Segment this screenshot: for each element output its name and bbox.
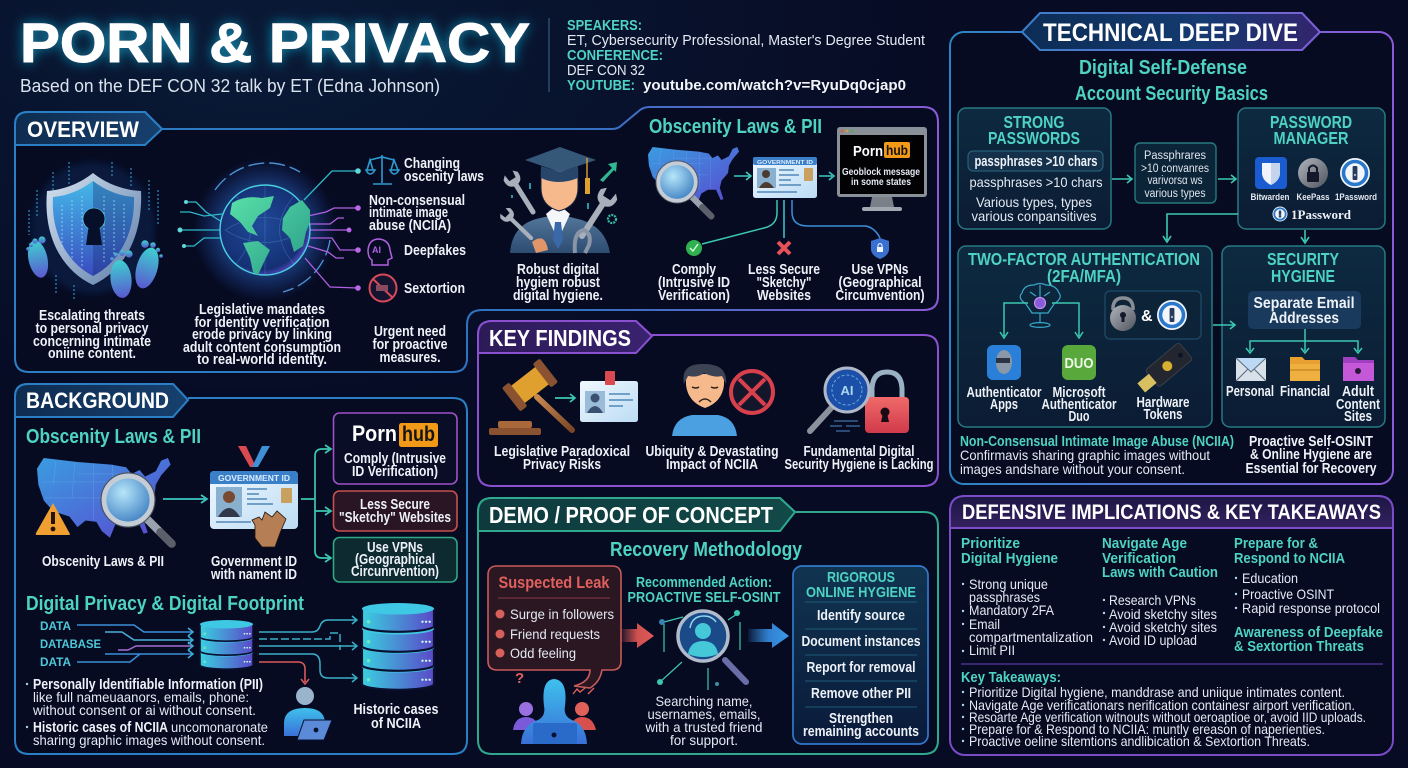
icon: check xyxy=(686,240,702,256)
box: rigorous online hygiene: Identify source xyxy=(817,608,905,624)
icon: authenticator app xyxy=(987,345,1021,380)
icon: globe with circuit lines xyxy=(178,158,361,302)
column: navigate age verification xyxy=(1102,535,1218,648)
box: two-factor authentication: Microsoft xyxy=(1052,385,1106,401)
column: prepare for NCIIA: Respond to NCIIA xyxy=(1234,550,1345,567)
text: robust hygiene: Robust digital xyxy=(517,262,599,278)
caption: ubiquity xyxy=(646,444,778,473)
caption: government ID xyxy=(210,554,297,583)
panel: overview xyxy=(15,107,938,372)
box: comply: hub xyxy=(402,423,435,446)
label: NCIIA: abuse (NCIIA) xyxy=(369,218,451,234)
divider xyxy=(548,18,550,92)
text: robust hygiene xyxy=(513,262,603,304)
label: changing laws: oscenity laws xyxy=(404,169,484,185)
caption: fundamental: Security Hygiene is Lacking xyxy=(784,457,934,473)
panel: key findings xyxy=(478,321,938,486)
icon: financial folder xyxy=(1290,357,1320,381)
box: comply: Comply (Intrusive xyxy=(344,451,446,467)
icon: sad person and red X xyxy=(672,364,773,436)
arrow: passphrases to manager xyxy=(1218,175,1236,183)
column: navigate age verification: Avoid sketchy sites xyxy=(1109,606,1217,622)
box: password manager: MANAGER xyxy=(1274,128,1349,148)
panel: demo xyxy=(478,498,938,754)
talk details: youtube.com/watch?v=RyuDq0cjap0 xyxy=(643,77,906,94)
box: two-factor authentication: Apps xyxy=(990,397,1018,413)
box: suspected leak: Surge in followers xyxy=(510,606,614,622)
caption: historic cases: of NCIIA xyxy=(371,716,421,732)
heading: technical deep dive xyxy=(1022,13,1320,50)
box: suspected leak: Odd feeling xyxy=(510,645,576,661)
text: escalating threats xyxy=(33,308,151,362)
data labels: DATABASE xyxy=(40,637,101,651)
icon: government ID with hand: GOVERNMENT ID xyxy=(218,474,290,483)
subtitle: Based on the DEF CON 32 talk by ET (Edna Johnson) xyxy=(20,76,440,96)
box: two-factor authentication: TWO-FACTOR AUTHENTICATION xyxy=(968,249,1200,269)
text: PII bullets: Historic cases of NCIIA xyxy=(33,720,168,736)
text: key takeaways: Key Takeaways: xyxy=(961,669,1061,686)
box: comply: ID Verification) xyxy=(352,464,438,480)
box: two-factor authentication: Tokens xyxy=(1144,407,1182,423)
text: less secure: "Sketchy" xyxy=(756,275,812,291)
text: searching: with a trusted friend xyxy=(645,719,762,735)
text: NCIIA definition: images andshare without your consent. xyxy=(960,461,1185,477)
box: less secure xyxy=(334,491,457,531)
text: legislative mandates: to real-world identity. xyxy=(197,352,327,368)
heading: account security: Account Security Basics xyxy=(1075,82,1268,105)
icon: monitor geoblock: Porn xyxy=(853,143,883,160)
column: prepare for NCIIA: Awareness of Deepfake xyxy=(1234,624,1383,641)
label: changing laws xyxy=(404,156,484,185)
text: NCIIA definition xyxy=(960,434,1234,477)
text: PII bullets: like full nameuaanors, emails, phone: xyxy=(33,689,249,705)
arrow: leak to OSINT xyxy=(621,623,654,648)
text: legislative mandates: adult content consumption xyxy=(183,340,341,356)
column: prepare for NCIIA: Proactive OSINT xyxy=(1242,586,1334,602)
arrow: leak to person xyxy=(259,662,309,684)
box: two-factor authentication: Authenticator xyxy=(966,385,1042,401)
text: NCIIA definition: Confirmavis sharing graphic images without xyxy=(960,447,1210,463)
box: security hygiene: SECURITY xyxy=(1267,249,1339,269)
arrow: 2FA to hygiene xyxy=(1213,321,1235,329)
talk details: DEF CON 32 xyxy=(567,63,645,79)
icon: duo xyxy=(1062,345,1096,380)
box: VPNs: Circunrvention) xyxy=(351,564,439,580)
label: NCIIA: intimate image xyxy=(369,205,448,221)
arrow: map to ID xyxy=(163,495,207,503)
heading: digital self-defense: Digital Self-Defense xyxy=(1079,56,1247,79)
text: NCIIA definition: Non-Consensual Intimate Image Abuse (NCIIA) xyxy=(960,434,1234,450)
icon: people with laptop xyxy=(513,670,596,744)
text: escalating threats: oniine content. xyxy=(48,346,136,362)
icon: duo: DUO xyxy=(1064,355,1094,372)
column: prioritize digital hygiene xyxy=(961,535,1093,658)
data flow lines into database xyxy=(77,625,193,662)
icon: AI head: AI xyxy=(372,245,381,255)
column: navigate age verification: Avoid ID upload xyxy=(1109,632,1197,648)
icon: keepass xyxy=(1298,158,1328,188)
box: passphrases: >10 convanres xyxy=(1141,163,1209,175)
box: suspected leak xyxy=(488,566,621,688)
label: NCIIA: Non-consensual xyxy=(369,193,465,209)
text: urgent need xyxy=(372,324,448,366)
text: PII bullets xyxy=(26,677,268,748)
column: prepare for NCIIA: Prepare for & xyxy=(1234,535,1318,552)
box: passphrases: Passphrares xyxy=(1144,150,1206,162)
text: legislative mandates: Legislative mandates xyxy=(199,302,325,318)
text: less secure: Websites xyxy=(757,288,811,304)
box: password manager: Bitwarden xyxy=(1250,192,1290,203)
icon: US map with magnifier xyxy=(648,147,739,216)
box: less secure: Less Secure xyxy=(360,497,430,513)
icon: OSINT magnifier xyxy=(657,610,746,690)
column: prioritize digital hygiene: Limit PII xyxy=(969,642,1015,658)
arrows: manager to 2FA and hygiene xyxy=(1163,214,1309,243)
text: PII bullets: sharing graphic images without consent. xyxy=(33,732,265,748)
box: rigorous online hygiene: Document instances xyxy=(802,634,920,650)
box: password manager xyxy=(1238,108,1385,229)
text: proactive self-OSINT xyxy=(1246,434,1376,477)
icon: government ID with hand xyxy=(210,446,298,547)
icon: VPN shield xyxy=(871,238,889,259)
text: urgent need: measures. xyxy=(380,350,440,366)
text: escalating threats: Escalating threats xyxy=(39,308,145,324)
column: prepare for NCIIA xyxy=(1234,535,1383,655)
icon: person with laptop xyxy=(284,687,332,740)
box: security hygiene: Addresses xyxy=(1269,310,1339,327)
icon: small database xyxy=(200,620,253,669)
icon: hardware token xyxy=(1134,342,1193,396)
box: security hygiene: Content xyxy=(1336,397,1380,413)
text: comply: Comply xyxy=(672,262,716,278)
arrow: passwords to passphrases xyxy=(1112,175,1132,183)
column: navigate age verification: Avoid sketchy sites xyxy=(1109,619,1217,635)
text: key takeaways: Prioritize Digital hygiene, manddrase and uniique intimates content. xyxy=(969,684,1345,700)
connector: ID to options xyxy=(301,445,331,562)
text: key takeaways: Prepare for & Respond to NCIIA: muntly ereason of naperienties. xyxy=(969,721,1325,737)
box: passphrases: varivorsα ws xyxy=(1148,175,1203,187)
text: PII bullets: uncomonaronate xyxy=(171,719,268,735)
box: rigorous online hygiene: remaining accounts xyxy=(803,724,919,740)
box: VPNs: Use VPNs xyxy=(367,540,423,556)
icon: gavel and ID xyxy=(489,358,638,435)
icon: large database xyxy=(362,603,434,690)
box: strong passwords: PASSWORDS xyxy=(988,128,1080,148)
icon: 1password xyxy=(1340,158,1370,188)
label: deepfakes: Deepfakes xyxy=(404,243,466,259)
box: passphrases: various types xyxy=(1144,188,1206,200)
column: prioritize digital hygiene: passphrases xyxy=(969,589,1040,605)
box: security hygiene: Financial xyxy=(1280,384,1330,400)
text: searching: usernames, emails, xyxy=(648,706,760,722)
label: changing laws: Changing xyxy=(404,156,460,172)
box: security hygiene: HYGIENE xyxy=(1271,266,1335,286)
icon: monitor geoblock xyxy=(837,127,927,211)
caption: obscenity: Obscenity Laws & PII xyxy=(42,554,164,570)
text: use VPNs xyxy=(836,262,925,304)
arrow: OSINT to hygiene xyxy=(748,623,789,648)
caption: fundamental: Fundamental Digital xyxy=(804,444,914,460)
heading: recommended action: Recommended Action: xyxy=(636,575,772,591)
caption: historic cases: Historic cases xyxy=(354,702,438,718)
label: sextortion: Sextortion xyxy=(404,281,465,297)
panel: technical deep dive xyxy=(950,13,1393,484)
icon: US map, magnifier, warning xyxy=(36,458,172,544)
column: prioritize digital hygiene: compartmentalization xyxy=(969,629,1093,645)
caption: legislative xyxy=(494,444,630,473)
box: two-factor authentication: Authenticator xyxy=(1042,397,1117,413)
caption: government ID: with nament ID xyxy=(210,567,297,583)
box: strong passwords: STRONG xyxy=(1004,112,1064,132)
caption: government ID: Government ID xyxy=(211,554,297,570)
icon: government ID: GOVERNMENT ID xyxy=(757,160,813,166)
column: prepare for NCIIA: & Sextortion Threats xyxy=(1234,638,1364,655)
column: prioritize digital hygiene: Mandatory 2FA xyxy=(969,602,1055,618)
column: prepare for NCIIA: Education xyxy=(1242,570,1298,586)
icon: shield with keyhole and footprints xyxy=(25,162,163,299)
icon: AI head xyxy=(368,239,392,265)
heading: overview: OVERVIEW xyxy=(27,117,139,142)
text: use VPNs: Circumvention) xyxy=(836,288,925,304)
heading: digital privacy: Digital Privacy & Digital Footprint xyxy=(26,592,304,615)
box: strong passwords xyxy=(958,108,1111,229)
text: robust hygiene: digital hygiene. xyxy=(513,288,603,304)
heading: demo: DEMO / PROOF OF CONCEPT xyxy=(489,502,773,528)
icon: red x xyxy=(778,242,790,254)
box: less secure: "Sketchy" Websites xyxy=(339,510,451,526)
box: password manager: 1Password xyxy=(1335,192,1377,203)
column: prioritize digital hygiene: Email xyxy=(969,616,1000,632)
box: comply: Porn xyxy=(352,421,397,446)
text: searching: for support. xyxy=(670,732,738,748)
box: security hygiene: Separate Email xyxy=(1254,295,1354,312)
label: NCIIA xyxy=(369,193,465,234)
icon: government ID xyxy=(753,157,817,198)
text: urgent need: for proactive xyxy=(372,337,448,353)
icon: bitwarden xyxy=(1255,157,1287,189)
text: use VPNs: (Geographical xyxy=(838,275,922,291)
icon: monitor geoblock: Geoblock message xyxy=(842,166,920,178)
icon: brain xyxy=(1020,284,1060,327)
box: suspected leak: Suspected Leak xyxy=(498,573,610,592)
column: prioritize digital hygiene: Prioritize xyxy=(961,535,1020,552)
box: rigorous online hygiene xyxy=(793,566,928,744)
column: navigate age verification: Research VPNs xyxy=(1109,592,1196,608)
data labels: DATA xyxy=(40,619,71,633)
panel: defensive implications xyxy=(950,496,1393,755)
icon: no sextortion xyxy=(370,274,396,302)
box: two-factor authentication: (2FA/MFA) xyxy=(1047,266,1121,286)
heading: recommended action xyxy=(628,575,781,606)
column: navigate age verification: Laws with Caution xyxy=(1102,564,1218,581)
talk details xyxy=(567,18,925,94)
icon: monitor geoblock: hub xyxy=(886,142,908,158)
text: comply: Verification) xyxy=(658,288,730,304)
heading: recovery: Recovery Methodology xyxy=(610,538,803,561)
box: password manager: PASSWORD xyxy=(1270,112,1352,132)
box: strong passwords: Various types, types xyxy=(976,194,1092,210)
text: comply: (Intrusive ID xyxy=(658,275,730,291)
text: key takeaways xyxy=(961,669,1366,749)
text: proactive self-OSINT: Proactive Self-OSINT xyxy=(1249,434,1373,450)
column: prepare for NCIIA: Rapid response protocol xyxy=(1242,600,1380,616)
talk details: CONFERENCE: xyxy=(567,48,663,64)
box: password manager: KeePass xyxy=(1296,192,1330,203)
caption: ubiquity: Ubiquity & Devastating xyxy=(646,444,778,460)
icon: lock and ring xyxy=(1105,291,1201,339)
box: two-factor authentication: Hardware xyxy=(1136,395,1190,411)
text: escalating threats: to personal privacy xyxy=(36,321,148,337)
box: rigorous online hygiene: Report for removal xyxy=(806,660,916,676)
column: navigate age verification: Verification xyxy=(1102,550,1176,567)
text: robust hygiene: hygiem robust xyxy=(516,275,600,291)
talk details: ET, Cybersecurity Professional, Master's Degree Student xyxy=(567,33,925,49)
column: prioritize digital hygiene: Strong unique xyxy=(969,576,1048,592)
connectors from ID to options xyxy=(702,200,880,244)
box: strong passwords: various conpansitives xyxy=(972,208,1096,224)
caption: legislative: Privacy Risks xyxy=(523,457,601,473)
caption: historic cases xyxy=(354,702,438,732)
text: searching: Searching name, xyxy=(656,693,752,709)
box: two-factor authentication xyxy=(958,246,1212,427)
icon: AI magnifier and lock: AI xyxy=(840,383,854,398)
caption: ubiquity: Impact of NCIIA xyxy=(666,457,758,473)
box: VPNs xyxy=(334,538,457,582)
data labels: DATA xyxy=(40,655,71,669)
icon: scales xyxy=(366,155,399,184)
box: password manager: 1Password xyxy=(1291,207,1352,222)
text: less secure: Less Secure xyxy=(748,262,820,278)
text: proactive self-OSINT: & Online Hygiene are xyxy=(1250,447,1372,463)
text: PII bullets: without consent or ai without consent. xyxy=(32,702,256,718)
box: security hygiene: Personal xyxy=(1226,384,1274,400)
data flow lines out of database xyxy=(259,616,357,682)
title: PORN & PRIVACY xyxy=(20,11,530,74)
box: rigorous online hygiene: Strengthen xyxy=(829,711,893,727)
text: urgent need: Urgent need xyxy=(374,324,446,340)
text: PII bullets: Personally Identifiable Information (PII) xyxy=(33,677,263,693)
heading: obscenity laws: Obscenity Laws & PII xyxy=(649,115,822,138)
heading: background: BACKGROUND xyxy=(26,388,169,413)
column: navigate age verification: Navigate Age xyxy=(1102,535,1187,552)
arrows: map to ID to screen xyxy=(734,172,834,180)
text: use VPNs: Use VPNs xyxy=(852,262,908,278)
box: suspected leak: Friend requests xyxy=(510,626,600,642)
talk details: YOUTUBE: xyxy=(567,78,635,94)
heading: overview xyxy=(15,112,162,145)
box: strong passwords: passphrases >10 chars xyxy=(970,174,1102,190)
box: passphrases xyxy=(1135,143,1216,203)
box: rigorous online hygiene: RIGOROUS xyxy=(827,569,895,586)
caption: legislative: Legislative Paradoxical xyxy=(494,444,630,460)
icon: AI magnifier and lock xyxy=(810,368,909,433)
heading: recommended action: PROACTIVE SELF-OSINT xyxy=(628,590,781,606)
box: comply xyxy=(334,413,457,484)
box: security hygiene: Adult xyxy=(1342,384,1374,400)
data labels xyxy=(40,619,101,669)
icon: people with laptop: ? xyxy=(515,670,524,687)
box: VPNs: (Geographical xyxy=(355,552,435,568)
heading: technical deep dive: TECHNICAL DEEP DIVE xyxy=(1043,19,1298,47)
panel: background xyxy=(15,384,467,754)
caption: fundamental xyxy=(784,444,934,473)
text: key takeaways: Proactive oeline sitemtions andlibication & Sextortion Threats. xyxy=(969,733,1310,749)
text: legislative mandates xyxy=(183,302,341,368)
box: two-factor authentication: Duo xyxy=(1068,409,1090,425)
text: legislative mandates: erode privacy by linking xyxy=(192,327,332,343)
box: strong passwords: passphrases >10 chars xyxy=(974,154,1098,170)
column: prioritize digital hygiene: Digital Hygiene xyxy=(961,550,1058,567)
text: proactive self-OSINT: Essential for Recovery xyxy=(1246,461,1376,477)
box: rigorous online hygiene: Remove other PII xyxy=(811,686,911,702)
text: key takeaways: Navigate Age verificationars nerification containesr airport verification. xyxy=(969,697,1355,713)
heading: obscenity laws: Obscenity Laws & PII xyxy=(26,425,201,448)
box: security hygiene xyxy=(1222,246,1385,427)
text: escalating threats: concerning intimate xyxy=(33,334,151,350)
box: security hygiene: Sites xyxy=(1344,409,1372,425)
icon: lock and ring: & xyxy=(1141,308,1153,325)
text: legislative mandates: for identity verification xyxy=(194,315,330,331)
text: searching xyxy=(645,693,762,748)
icon: adult folder xyxy=(1343,357,1374,381)
icon: envelope xyxy=(1236,358,1266,381)
icon: monitor geoblock: in some states xyxy=(851,176,911,188)
box: rigorous online hygiene: ONLINE HYGIENE xyxy=(806,584,916,601)
icon: graduate with wrenches xyxy=(498,147,620,253)
text: less secure xyxy=(748,262,820,304)
talk details: SPEAKERS: xyxy=(567,18,642,34)
heading: key findings: KEY FINDINGS xyxy=(489,325,631,351)
text: comply xyxy=(658,262,730,304)
